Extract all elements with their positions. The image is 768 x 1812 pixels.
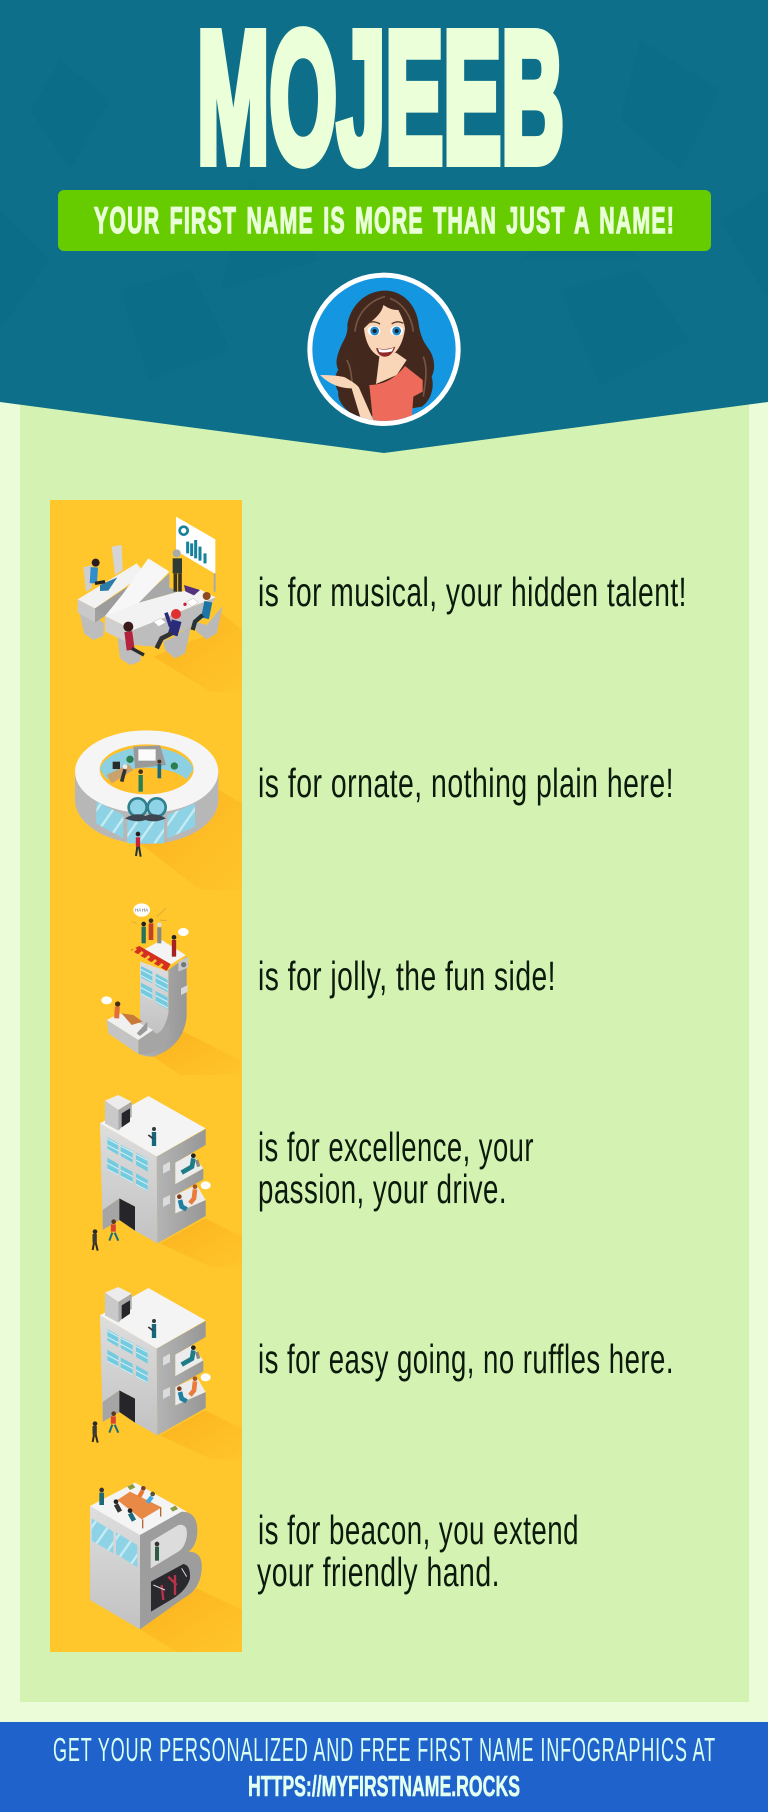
footer bbox=[0, 1722, 768, 1812]
illustration: letter B building bbox=[90, 1483, 242, 1652]
header panel bbox=[0, 0, 768, 453]
illustration: letter E building bbox=[93, 1095, 242, 1268]
illustration: second letter E building bbox=[93, 1287, 242, 1460]
illustration: letter J building: HA HA bbox=[135, 907, 148, 912]
header texture bbox=[0, 40, 768, 385]
panel: yellow illustration column bbox=[50, 500, 242, 1652]
avatar: smiling woman in circle bbox=[307, 273, 461, 426]
text: J line: is for jolly, the fun side! bbox=[258, 953, 556, 999]
subtitle banner bbox=[58, 190, 711, 251]
illustration: letter J building bbox=[101, 903, 224, 1074]
text: E line: passion, your drive. bbox=[258, 1166, 507, 1212]
illustration: letter O optician ring building bbox=[75, 730, 242, 890]
text: B line: your friendly hand. bbox=[257, 1549, 500, 1595]
text: E line bbox=[258, 1124, 534, 1212]
panel: content background bbox=[20, 395, 749, 1702]
text: E line: is for excellence, your bbox=[258, 1124, 534, 1170]
illustration: letter M office table bbox=[78, 517, 242, 692]
footer url: HTTPS://MYFIRSTNAME.ROCKS bbox=[248, 1771, 520, 1803]
text: B line: is for beacon, you extend bbox=[258, 1507, 579, 1553]
text: B line bbox=[257, 1507, 579, 1595]
